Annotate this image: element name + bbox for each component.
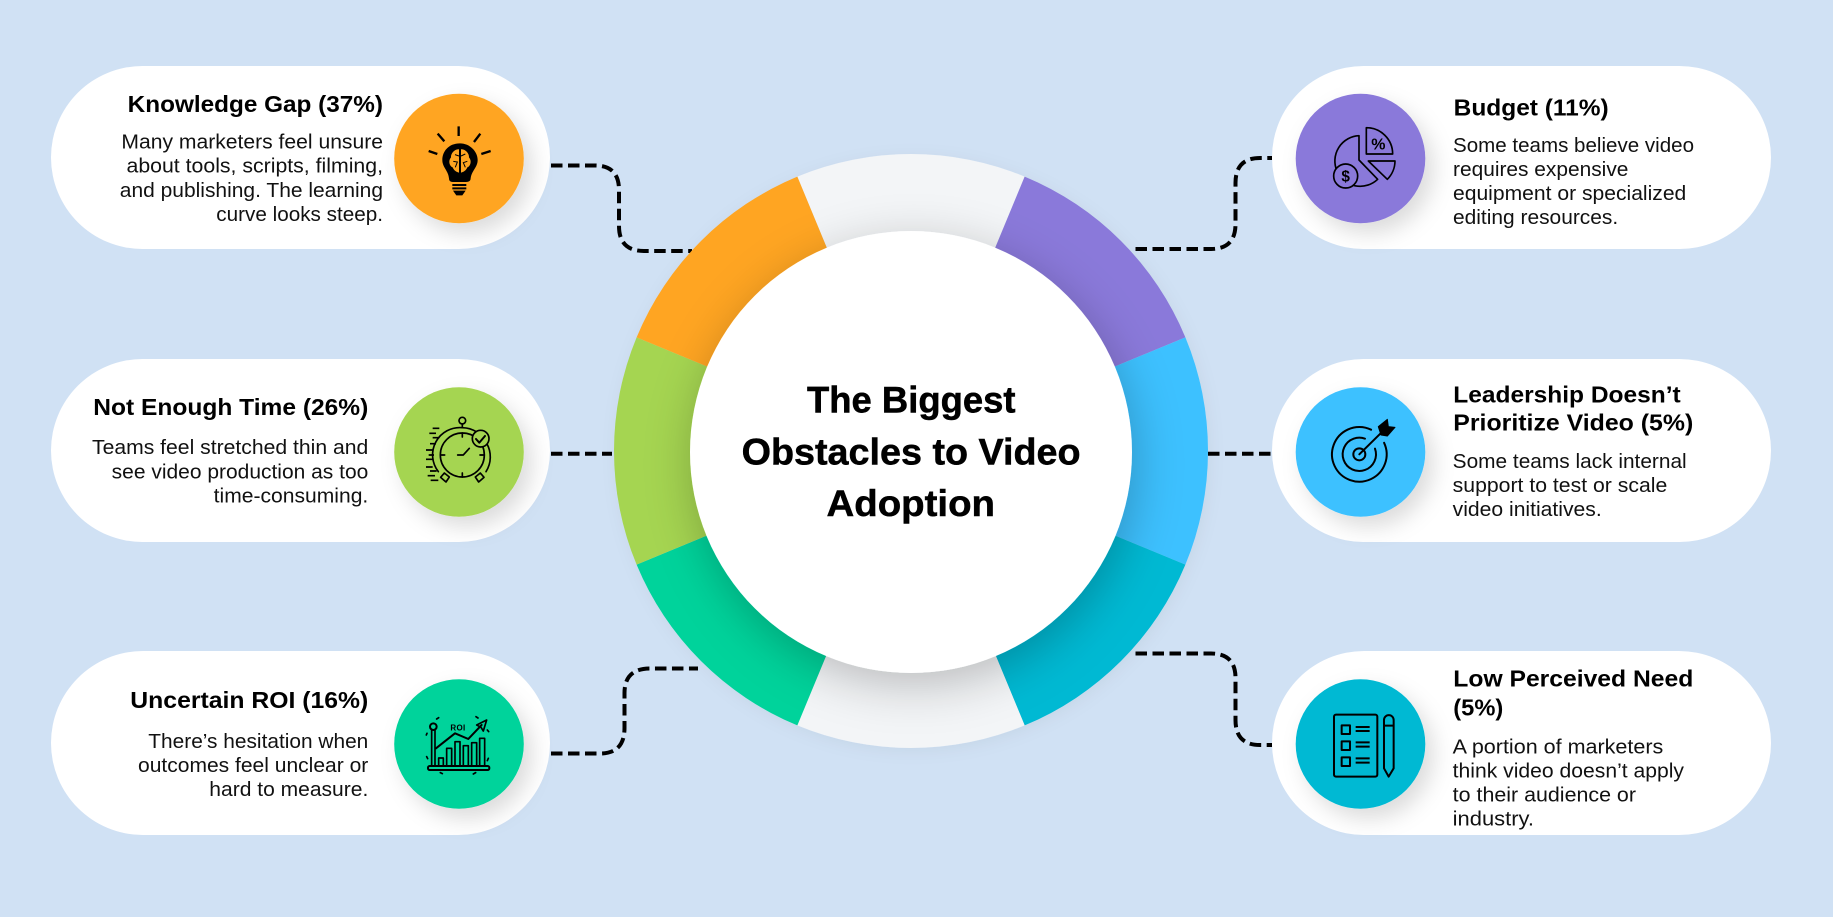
segment: purple bbox=[911, 177, 1185, 451]
heading: Low Perceived Need bbox=[1453, 666, 1693, 692]
donut ring with eight segments bbox=[614, 154, 1208, 748]
description bbox=[138, 730, 368, 801]
description: and publishing. The learning bbox=[120, 179, 383, 202]
panel: not enough time bbox=[51, 359, 550, 542]
icon: checklist and pencil bbox=[1296, 679, 1425, 809]
description bbox=[92, 436, 368, 507]
description: industry. bbox=[1453, 807, 1534, 830]
icon: pie chart with dollar coin bbox=[1296, 94, 1425, 223]
icon: target with arrow bbox=[1296, 387, 1425, 517]
description: curve looks steep. bbox=[216, 203, 383, 226]
description: hard to measure. bbox=[209, 778, 368, 801]
heading: Budget (11%) bbox=[1454, 94, 1609, 120]
connector: low perceived need to ring bbox=[1136, 654, 1272, 745]
description bbox=[1453, 735, 1685, 830]
heading: Not Enough Time (26%) bbox=[93, 394, 368, 420]
description: requires expensive bbox=[1453, 158, 1628, 181]
icon: alarm clock with check bbox=[394, 387, 524, 517]
description bbox=[1453, 134, 1694, 229]
segment: blue bbox=[911, 337, 1208, 565]
segment: teal bbox=[911, 451, 1185, 725]
segment: lime bbox=[614, 337, 911, 565]
connector: budget to ring bbox=[1136, 158, 1272, 249]
heading: Leadership Doesn’t bbox=[1453, 381, 1681, 407]
description: time-consuming. bbox=[214, 484, 368, 507]
title: Adoption bbox=[826, 483, 995, 524]
description: editing resources. bbox=[1453, 206, 1618, 229]
segment: orange bbox=[637, 177, 911, 451]
title: Obstacles to Video bbox=[742, 432, 1081, 473]
heading bbox=[1453, 381, 1693, 436]
description: There’s hesitation when bbox=[148, 730, 368, 753]
panel: budget bbox=[1272, 66, 1771, 249]
description: support to test or scale bbox=[1453, 474, 1667, 497]
description: Some teams lack internal bbox=[1453, 450, 1687, 473]
heading: Prioritize Video (5%) bbox=[1453, 410, 1693, 436]
segment: top neutral bbox=[797, 154, 1025, 451]
center circle bbox=[690, 231, 1132, 673]
panel: low perceived need bbox=[1272, 651, 1771, 835]
description: think video doesn’t apply bbox=[1453, 759, 1685, 782]
icon: ROI growth chart bbox=[394, 679, 524, 809]
description: equipment or specialized bbox=[1453, 182, 1686, 205]
icon: light bulb with brain bbox=[394, 94, 524, 223]
icon: pie chart with dollar coin: $ bbox=[1341, 168, 1350, 185]
description: about tools, scripts, filming, bbox=[126, 155, 383, 178]
icon: pie chart with dollar coin: % bbox=[1371, 136, 1385, 153]
connector: leadership to ring bbox=[1208, 452, 1272, 456]
panel: uncertain ROI bbox=[51, 651, 550, 835]
description bbox=[120, 131, 383, 226]
description: Teams feel stretched thin and bbox=[92, 436, 368, 459]
description bbox=[1453, 450, 1687, 521]
description: A portion of marketers bbox=[1453, 735, 1663, 758]
description: to their audience or bbox=[1453, 783, 1636, 806]
connector: not enough time to ring bbox=[551, 452, 612, 456]
description: see video production as too bbox=[112, 460, 368, 483]
heading: Uncertain ROI (16%) bbox=[130, 687, 368, 713]
heading: Knowledge Gap (37%) bbox=[128, 91, 383, 117]
description: Many marketers feel unsure bbox=[121, 131, 383, 154]
panel: leadership bbox=[1272, 359, 1771, 542]
connector: knowledge gap to ring bbox=[551, 166, 692, 251]
panel: knowledge gap bbox=[51, 66, 550, 249]
description: outcomes feel unclear or bbox=[138, 754, 368, 777]
title: The Biggest bbox=[807, 379, 1016, 420]
icon: ROI growth chart: ROI bbox=[450, 723, 466, 732]
heading: (5%) bbox=[1453, 694, 1503, 720]
segment: bottom neutral bbox=[797, 451, 1025, 748]
heading bbox=[1453, 666, 1693, 720]
title bbox=[742, 379, 1081, 524]
description: Some teams believe video bbox=[1453, 134, 1694, 157]
connector: uncertain ROI to ring bbox=[551, 668, 698, 754]
segment: green bbox=[637, 451, 911, 725]
description: video initiatives. bbox=[1453, 498, 1602, 521]
